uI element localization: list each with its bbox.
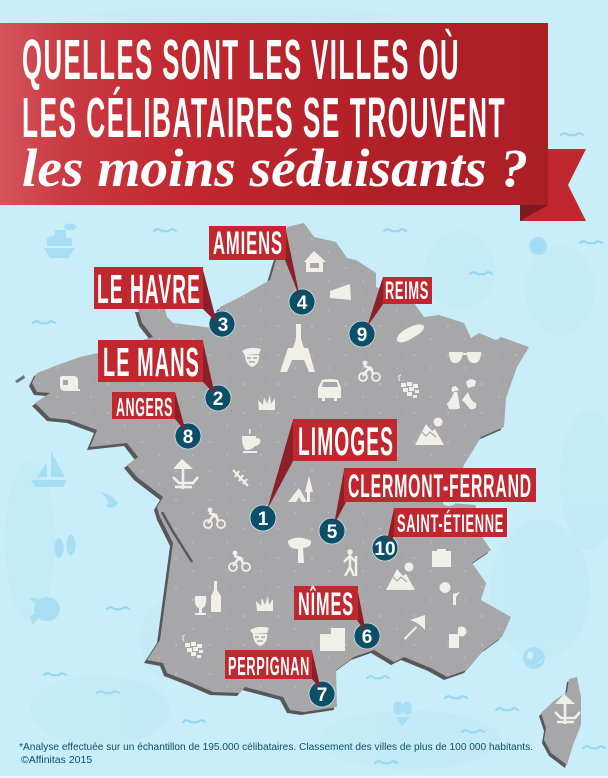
- ribbon tail: [520, 149, 586, 221]
- label Amiens: AMIENS: [213, 225, 283, 261]
- icon: shell: [100, 492, 118, 508]
- banner panel: [0, 23, 548, 205]
- icon: tree: [288, 538, 311, 563]
- label Perpignan: PERPIGNAN: [228, 651, 310, 681]
- icon: bikini: [393, 702, 412, 727]
- text: LE MANS: [103, 339, 200, 385]
- pin 2 Le Mans: 2: [213, 389, 223, 410]
- icon: sunglasses: [449, 352, 481, 363]
- pin 5 Clermont-Ferrand: [319, 470, 346, 544]
- text: LE HAVRE: [97, 266, 201, 312]
- sea wave marks: [33, 133, 605, 763]
- icon: caravan: [60, 376, 80, 391]
- pin 5 Clermont-Ferrand: 5: [327, 522, 338, 543]
- map: Gironde estuary: [162, 512, 192, 562]
- pin 2 Le Mans: [203, 342, 231, 411]
- label Le Mans: [98, 339, 203, 385]
- icon: baguette: [397, 324, 424, 342]
- label Le Havre: [94, 266, 203, 312]
- footnote: ©Affinitas 2015: [21, 754, 92, 766]
- icon: drink: [449, 627, 467, 648]
- icon: fish: [28, 597, 60, 625]
- pin 9 Reims: [349, 277, 383, 347]
- pin 10 Saint-Étienne: 10: [374, 539, 396, 560]
- icon: house: [304, 251, 326, 272]
- pin 1 Limoges: 1: [258, 509, 269, 530]
- map: Brittany island: [15, 375, 25, 383]
- map of France: [15, 223, 581, 768]
- pin 3 Le Havre: 3: [218, 315, 228, 336]
- icon: cheese: [330, 284, 351, 300]
- pin 7 Perpignan: [309, 651, 335, 707]
- title banner: [0, 23, 586, 221]
- pin 6 Nîmes: 6: [362, 627, 372, 648]
- icon: sailboat: [31, 451, 67, 487]
- icon: car: [318, 379, 341, 401]
- label Angers: [112, 392, 175, 422]
- pin 6 Nîmes: [354, 587, 380, 649]
- label Saint-Étienne: SAINT-ÉTIENNE: [397, 509, 504, 538]
- icon: bike: [359, 361, 380, 381]
- label Reims: REIMS: [385, 277, 429, 305]
- label Nîmes: NÎMES: [298, 586, 354, 622]
- icon: beret man: [250, 627, 269, 646]
- map: shadow: [29, 226, 526, 715]
- footnote: [19, 741, 533, 766]
- map: dot texture: [32, 223, 529, 712]
- icon: coffee cup: [242, 429, 260, 453]
- icon: flower: [440, 582, 460, 605]
- icon: tent and tree: [288, 476, 313, 502]
- icon: beach chair: [173, 459, 198, 489]
- pin 9 Reims: 9: [357, 325, 367, 346]
- icon: flip-flops: [54, 534, 76, 558]
- label Saint-Étienne: [394, 508, 507, 538]
- label Amiens: [209, 225, 286, 261]
- icon: ship: [44, 224, 76, 258]
- footnote: *Analyse effectuée sur un échantillon de 195.000 célibataires. Classement des villes de plus de 100 000 habitants.: [19, 741, 533, 753]
- map: lake: [443, 500, 455, 506]
- pin 4 Amiens: 4: [297, 293, 308, 314]
- title line 3: les moins séduisants ?: [22, 138, 528, 198]
- label Reims: [383, 277, 432, 305]
- icon: hiker: [344, 549, 356, 576]
- icon: grapes: [399, 375, 419, 398]
- icon: beret man: [242, 348, 261, 367]
- icon: hotel: [320, 628, 345, 651]
- icon: bike: [229, 551, 250, 571]
- icon: beach chair Corsica: [555, 694, 580, 724]
- icon: Eiffel tower: [280, 324, 315, 372]
- icon: grapes: [183, 635, 203, 658]
- pin 8 Angers: [175, 392, 201, 449]
- icon: grass: [258, 395, 275, 410]
- pin 7 Perpignan: 7: [317, 685, 327, 706]
- pin 8 Angers: 8: [183, 427, 193, 448]
- pin 1 Limoges: [250, 420, 293, 531]
- icon: wine glass: [195, 596, 206, 615]
- pin 3 Le Havre: [203, 270, 235, 337]
- map icons: [60, 251, 580, 724]
- icon: parasol: [404, 615, 425, 640]
- icon: sun: [529, 237, 547, 255]
- ribbon fold: [520, 205, 548, 221]
- pin 10 Saint-Étienne: [372, 508, 398, 561]
- text: ANGERS: [116, 392, 173, 422]
- text: LIMOGES: [298, 420, 394, 464]
- icon: wine bottle: [211, 581, 221, 612]
- icon: globe: [523, 647, 545, 669]
- icon: bike: [204, 508, 225, 528]
- icon: wheat: [233, 470, 248, 486]
- map: mainland: [32, 223, 529, 712]
- icon: trees: [447, 379, 476, 409]
- icon: suitcase: [432, 549, 451, 567]
- icon: mountain: [415, 418, 444, 445]
- pin 4 Amiens: [285, 226, 315, 315]
- icon: mountain: [386, 562, 415, 590]
- label Limoges: [293, 419, 397, 464]
- icon: grass: [256, 596, 273, 611]
- label Nîmes: [294, 586, 358, 622]
- label Perpignan: [225, 650, 312, 681]
- map: Corsica: [539, 677, 581, 768]
